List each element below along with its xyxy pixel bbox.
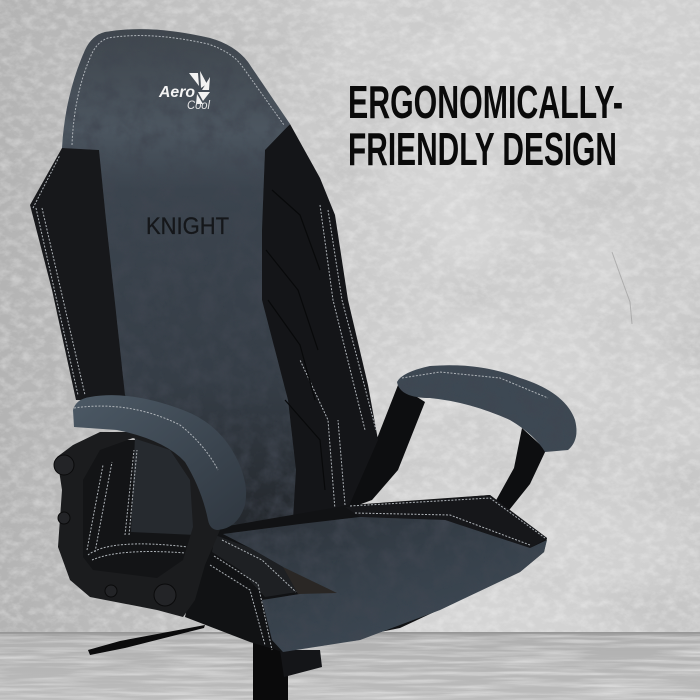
left arm pad stitching bbox=[74, 406, 218, 470]
logo wordmark: Aero bbox=[158, 84, 195, 101]
right arm pad bbox=[397, 365, 576, 452]
right arm pad stitching bbox=[402, 372, 548, 398]
seat right bolster bbox=[345, 495, 547, 548]
chair bbox=[30, 29, 576, 652]
right arm support bbox=[345, 385, 546, 514]
left arm pivot knobs bbox=[54, 455, 176, 606]
gas lift pole bbox=[253, 640, 288, 700]
logo: AeroCool: Cool bbox=[187, 98, 210, 112]
seat cushion bbox=[223, 517, 547, 652]
logo: AeroCool bbox=[158, 71, 210, 112]
lever bbox=[88, 625, 205, 655]
title bbox=[348, 76, 623, 175]
seat wedge bbox=[283, 567, 337, 594]
background: floor bbox=[0, 632, 700, 700]
seat lower shell bbox=[185, 495, 547, 652]
seat left bolster perforated bbox=[212, 535, 297, 597]
right wing panel lines bbox=[266, 190, 325, 490]
KNIGHT label: KNIGHT bbox=[146, 213, 229, 240]
right wing bbox=[240, 124, 378, 530]
left arm frame bbox=[57, 432, 220, 617]
seat base cuff bbox=[280, 650, 322, 677]
stitching: back bbox=[33, 36, 376, 510]
logo icon bbox=[189, 71, 210, 104]
stitching: seat bbox=[210, 498, 545, 650]
left wing bbox=[30, 146, 130, 400]
back centre panel and headrest bbox=[62, 29, 296, 545]
left arm pad bbox=[73, 395, 246, 530]
left arm inner seat back view bbox=[75, 436, 200, 585]
